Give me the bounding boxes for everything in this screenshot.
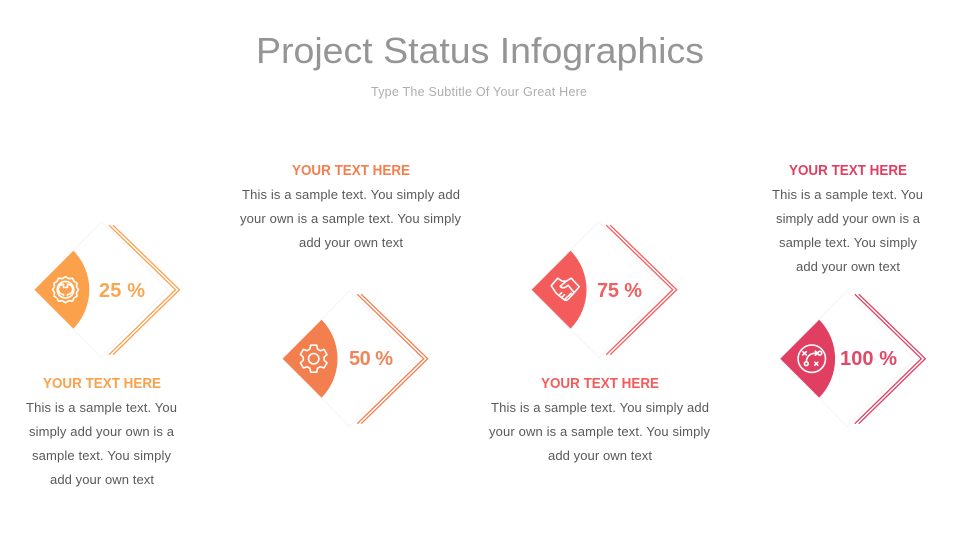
panel: 75 percent (489, 222, 710, 463)
text block: 100 percent: add your own text (796, 259, 900, 274)
text block: 50 percent (240, 187, 462, 250)
panel: 25 percent (26, 222, 180, 487)
text block: 25 percent (26, 400, 177, 487)
text block: 25 percent: This is a sample text. You (26, 400, 177, 415)
diamond: 100 percent (780, 291, 925, 427)
icon: wrench gear (52, 277, 78, 303)
panel: 50 percent (240, 163, 462, 427)
heading: 100 percent: YOUR TEXT HERE (789, 163, 907, 179)
text block: 100 percent: simply add your own is a (776, 211, 921, 226)
text block: 75 percent: your own is a sample text. You simply (489, 424, 710, 439)
text block: 50 percent: add your own text (299, 235, 403, 250)
text block: 25 percent: add your own text (50, 472, 154, 487)
icon: strategy play (798, 345, 826, 372)
diamond: 75 percent (532, 222, 677, 358)
panel: 100 percent (772, 163, 925, 427)
percent: 50: 50 % (349, 348, 393, 370)
diamond: 25 percent (34, 222, 180, 358)
percent: 100: 100 % (840, 348, 897, 370)
percent: 75: 75 % (597, 280, 642, 302)
heading: 25 percent: YOUR TEXT HERE (43, 376, 161, 392)
text block: 50 percent: your own is a sample text. You simply (240, 211, 462, 226)
text block: 100 percent (772, 187, 923, 274)
text block: 75 percent (489, 400, 710, 463)
text block: 75 percent: This is a sample text. You simply add (491, 400, 709, 415)
title: Project Status Infographics (256, 30, 704, 71)
percent: 25: 25 % (99, 280, 145, 302)
text block: 100 percent: sample text. You simply (779, 235, 918, 250)
heading: 75 percent: YOUR TEXT HERE (541, 376, 659, 392)
text block: 75 percent: add your own text (548, 448, 652, 463)
heading: 50 percent: YOUR TEXT HERE (292, 163, 410, 179)
icon: handshake (551, 278, 579, 300)
text block: 25 percent: simply add your own is a (29, 424, 175, 439)
text block: 25 percent: sample text. You simply (32, 448, 172, 463)
text block: 100 percent: This is a sample text. You (772, 187, 923, 202)
icon: gear (300, 345, 327, 372)
diamond: 50 percent (283, 291, 428, 427)
text block: 50 percent: This is a sample text. You simply add (242, 187, 460, 202)
subtitle: Type The Subtitle Of Your Great Here (371, 85, 587, 99)
